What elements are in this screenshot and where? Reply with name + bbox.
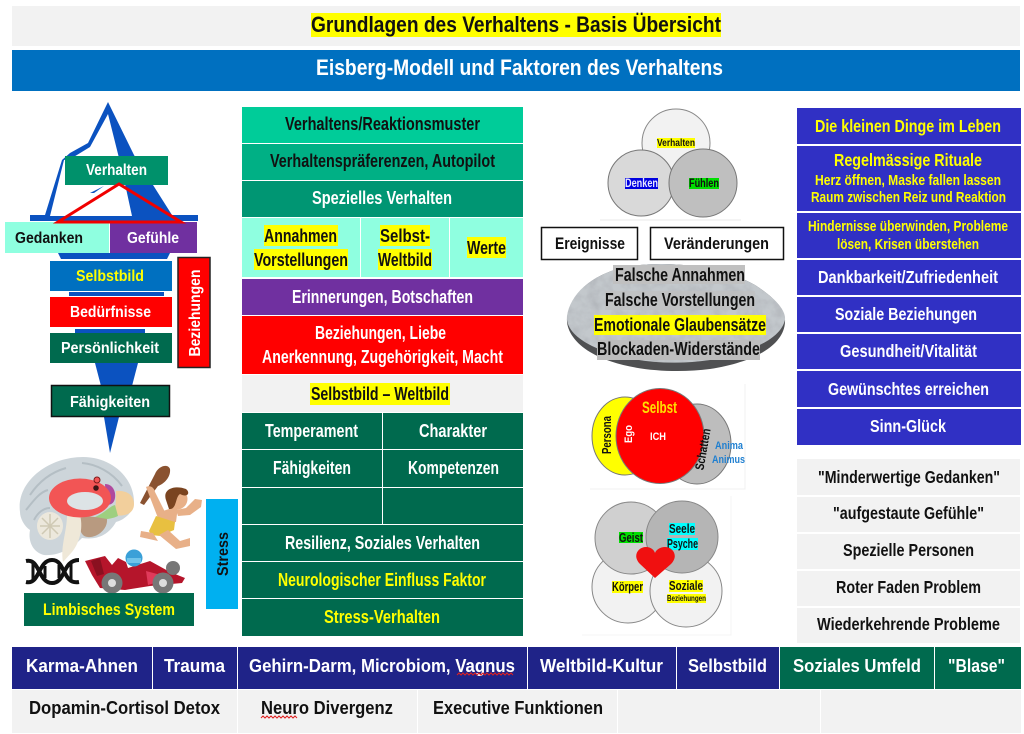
icon: DNA [26,560,79,583]
cell: Weltbild-Kultur [528,647,676,689]
row: Hindernisse: lösen, Krisen überstehen [837,237,979,253]
row: Spezielle Personen [797,534,1020,569]
row: aufgestaute Gefühle [797,497,1020,532]
panel: bottom blue row [12,647,1021,689]
row: Stress-Verhalten: Stress-Verhalten [324,606,440,627]
panel: stone with beliefs: Falsche Vorstellungen [605,289,755,310]
row: Annahmen, Selbstbild, Werte: Annahmen [264,225,337,246]
icon: brain [20,457,134,562]
diagram: Selbst Ego Persona Schatten [590,384,745,489]
diagram: Geist Seele Körper Soziale: Körper [612,580,643,594]
row group: Temperament and Charakter [242,413,523,449]
row: Neurologischer Einfluss Faktor [242,562,523,598]
row: Selbstbild - Weltbild: Selbstbild – Weltbild [311,383,449,404]
row: Hindernisse [797,213,1021,258]
diagram: Verhalten Denken Fühlen circles: Fühlen [689,178,719,190]
row: Verhaltens/Reaktionsmuster: Verhaltens/Reaktionsmuster [285,113,480,134]
icon: iceberg [30,102,198,453]
row: Beziehungen [242,316,523,374]
box: Veränderungen: Veränderungen [664,235,769,253]
box: Ereignisse: Ereignisse [555,235,625,253]
row: Annahmen, Selbstbild, Werte: Werte [467,237,506,258]
diagram: Selbst Ego Persona Schatten: Persona [600,415,614,454]
box: Gedanken [5,222,109,253]
diagram: Selbst Ego Persona Schatten: Selbst [642,398,677,417]
row: Spezielles Verhalten: Spezielles Verhalten [312,187,452,208]
box: Limbisches System: Limbisches System [43,601,175,619]
cell: Blase: "Blase" [948,655,1005,676]
red triangle [58,184,181,222]
panel: bottom grey row [12,690,1021,733]
row: Die kleinen Dinge [797,108,1021,144]
row: Dankbarkeit [797,260,1021,295]
panel: problems column [797,459,1020,643]
diagram: Selbst Ego Persona Schatten: Animus [712,454,745,466]
row: Gewünschtes erreichen [797,371,1021,407]
box: Stress [206,499,238,609]
row: Verhaltenspräferenzen: Verhaltenspräferenzen, Autopilot [270,150,495,171]
diagram: Selbst Ego Persona Schatten: Ego [623,425,635,443]
row: aufgestaute Gefühle: "aufgestaute Gefühle" [833,503,984,523]
cell: Executive Funktionen: Executive Funktionen [433,697,603,718]
panel: stone with beliefs: Blockaden-Widerstände [597,338,760,359]
diagram: Geist Seele Körper Soziale: Geist [619,531,644,545]
row group: Fähigkeiten and Kompetenzen: Kompetenzen [408,457,499,478]
box: Fähigkeiten [52,386,170,416]
row group: Temperament and Charakter: Charakter [419,420,487,441]
row: Gewünschtes erreichen: Gewünschtes erreichen [828,379,989,399]
diagram: Geist Seele Körper Soziale: Psyche [667,537,698,551]
row: Resilienz [242,525,523,561]
cell: Weltbild-Kultur: Weltbild-Kultur [540,655,663,676]
cell: Karma-Ahnen: Karma-Ahnen [26,655,138,676]
box: Beziehungen [178,258,210,368]
cell: Blase [935,647,1021,689]
diagram: Selbst Ego Persona Schatten: Anima [715,440,744,452]
cell: Trauma [153,647,237,689]
title [12,6,1020,46]
row: Spezielle Personen: Spezielle Personen [843,540,974,560]
diagram: Selbst Ego Persona Schatten: ICH [650,431,666,443]
icon: caveman [140,466,202,549]
cell: Dopamin-Cortisol Detox [12,690,237,733]
diagram: Geist Seele Körper Soziale [582,496,731,635]
row: Neurologischer Einfluss Faktor: Neurologischer Einfluss Faktor [278,569,486,590]
box: Ereignisse [542,228,638,260]
row group: Temperament and Charakter: Temperament [265,420,358,441]
panel: stone with beliefs: Falsche Annahmen [615,264,745,285]
row: Selbstbild - Weltbild [242,375,523,412]
cell: Executive Funktionen [418,690,617,733]
row: Stress-Verhalten [242,599,523,636]
cell: Dopamin-Cortisol Detox: Dopamin-Cortisol Detox [29,697,221,718]
diagram: Geist Seele Körper Soziale: Seele [669,522,695,536]
box: Bedürfnisse: Bedürfnisse [70,304,151,321]
diagram: Verhalten Denken Fühlen circles [600,109,741,220]
row: Annahmen, Selbstbild, Werte: Weltbild [378,249,432,270]
row: Soziale Beziehungen: Soziale Beziehungen [835,304,977,324]
box: Bedürfnisse [50,297,172,327]
row: Beziehungen: Anerkennung, Zugehörigkeit, Macht [262,346,503,367]
panel: limbic system [20,457,238,626]
panel: stone with beliefs [567,264,785,371]
row: Regelmässige Rituale [797,146,1021,211]
row: Gesundheit: Gesundheit/Vitalität [840,341,977,361]
box: Verhalten: Verhalten [86,162,147,179]
row: Sinn-Glück [797,409,1021,445]
cell: Neuro Divergenz: Neuro Divergenz [261,697,393,718]
row: Wiederkehrende Probleme [797,608,1020,643]
cell: Karma-Ahnen [12,647,152,689]
row: Roter Faden Problem [797,571,1020,606]
icon: race car [85,550,185,594]
box: Limbisches System [24,593,194,626]
cell: Trauma: Trauma [164,655,226,676]
box: Gedanken: Gedanken [15,230,83,247]
box: Stress: Stress [215,532,232,576]
row: Spezielles Verhalten [242,181,523,217]
row group: Fähigkeiten and Kompetenzen: Fähigkeiten [273,457,351,478]
subtitle banner [12,50,1020,91]
cell: Gehirn-Darm [238,647,527,689]
row: Roter Faden Problem: Roter Faden Problem [836,577,981,597]
cell: Gehirn-Darm: Gehirn-Darm, Microbiom, Vagnus [249,655,515,676]
cell: Selbstbild [677,647,779,689]
icon: heart [636,547,675,578]
subtitle banner: Eisberg-Modell und Faktoren des Verhaltens [316,55,723,80]
row: Annahmen, Selbstbild, Werte [242,218,523,277]
box: Persönlichkeit: Persönlichkeit [61,340,159,357]
box: Persönlichkeit [50,333,172,363]
row: Regelmässige Rituale: Regelmässige Rituale [834,150,982,170]
row: Verhaltens/Reaktionsmuster [242,107,523,143]
row: Verhaltenspräferenzen [242,144,523,180]
icon: stone [567,264,785,371]
panel: behaviour table [242,107,523,636]
row: Beziehungen: Beziehungen, Liebe [315,322,446,343]
diagram: Geist Seele Körper Soziale: Soziale [669,579,703,593]
diagram: Selbst Ego Persona Schatten: Schatten [693,427,714,471]
row: Erinnerungen: Erinnerungen, Botschaften [292,286,473,307]
row: Resilienz: Resilienz, Soziales Verhalten [285,532,480,553]
row: Annahmen, Selbstbild, Werte: Selbst- [380,225,430,246]
row: Annahmen, Selbstbild, Werte: Vorstellungen [254,249,348,270]
row group: Fähigkeiten and Kompetenzen [242,450,523,487]
diagram: Verhalten Denken Fühlen circles: Verhalten [657,137,695,149]
box: Fähigkeiten: Fähigkeiten [70,394,150,411]
row: Erinnerungen [242,279,523,315]
row: Soziale Beziehungen [797,297,1021,332]
panel: stone with beliefs: Emotionale Glaubensätze [594,314,766,335]
box: Beziehungen: Beziehungen [187,270,204,356]
box: Selbstbild: Selbstbild [76,268,144,285]
row: Sinn-Glück: Sinn-Glück [870,416,946,436]
cell: Soziales Umfeld [780,647,934,689]
cell: Selbstbild: Selbstbild [688,655,767,676]
cell: Neuro Divergenz [238,690,417,733]
box: Veränderungen [650,228,784,260]
row: Minderwertige Gedanken [797,459,1020,495]
diagram: Geist Seele Körper Soziale: Beziehungen [667,594,706,603]
box: Gefühle [110,222,197,253]
row: Gesundheit [797,334,1021,369]
row group: empty cells [242,488,523,524]
box: Selbstbild [50,261,172,291]
panel: iceberg model [5,102,210,453]
title: Grundlagen des Verhaltens - Basis Übersicht [311,12,722,37]
box: Gefühle: Gefühle [127,230,179,247]
cell: Soziales Umfeld: Soziales Umfeld [793,655,921,676]
diagram: Verhalten Denken Fühlen circles: Denken [625,178,658,190]
cells: empty [618,690,1021,733]
panel: resources column [797,108,1021,445]
box: Verhalten [65,156,168,185]
